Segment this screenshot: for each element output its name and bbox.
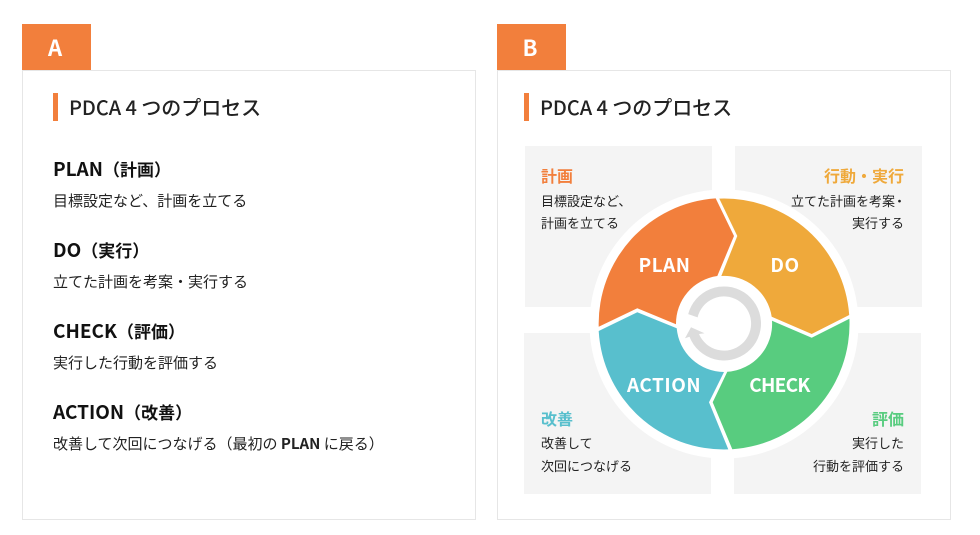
tab B: B	[522, 31, 537, 63]
segment: CHECK	[713, 319, 850, 449]
segment: PLAN	[599, 198, 734, 327]
panel A heading: PDCA 4 つのプロセス	[69, 92, 261, 121]
action description	[541, 433, 632, 475]
box: plan background	[525, 146, 712, 307]
DO heading: DO（実行）	[53, 236, 149, 263]
do description: 実行する	[852, 213, 904, 232]
plan description	[541, 191, 631, 232]
panel A frame	[22, 70, 476, 520]
ACTION heading: ACTION（改善）	[53, 398, 192, 425]
CHECK text: 実行した行動を評価する	[53, 352, 218, 373]
action description: 改善して	[541, 433, 593, 452]
box: do background	[735, 146, 922, 307]
tab A: A	[48, 31, 62, 63]
panel A heading accent	[53, 93, 58, 121]
action label: 改善	[541, 406, 573, 430]
DO text: 立てた計画を考案・実行する	[53, 271, 248, 292]
segment: DO: DO	[770, 251, 800, 278]
check label: 評価	[872, 406, 904, 430]
CHECK heading: CHECK（評価）	[53, 317, 185, 344]
tab B	[497, 24, 566, 70]
check description: 実行した	[852, 433, 904, 452]
box: action background	[524, 333, 711, 494]
icon: circular arrow	[685, 286, 761, 360]
segment: CHECK: CHECK	[749, 371, 811, 398]
white ring behind cycle	[590, 190, 858, 458]
check description: 行動を評価する	[813, 456, 904, 475]
do description: 立てた計画を考案・	[791, 191, 906, 210]
ACTION text: 改善して次回につなげる（最初の PLAN に戻る）	[53, 433, 384, 454]
panel B heading accent	[524, 93, 529, 121]
segment: DO	[719, 199, 849, 334]
action description: 次回につなげる	[541, 456, 632, 475]
panel B heading: PDCA 4 つのプロセス	[540, 92, 732, 121]
segment: ACTION	[599, 312, 728, 449]
plan label: 計画	[541, 163, 573, 187]
do label: 行動・実行	[824, 163, 904, 187]
check description	[813, 433, 904, 475]
plan description: 計画を立てる	[541, 213, 619, 232]
tab A	[22, 24, 91, 70]
panel B frame	[497, 70, 951, 520]
segment: PLAN: PLAN	[639, 251, 690, 278]
PLAN text: 目標設定など、計画を立てる	[53, 190, 247, 211]
segment: ACTION: ACTION	[626, 371, 701, 398]
PLAN heading: PLAN（計画）	[53, 155, 171, 182]
box: check background	[734, 333, 921, 494]
plan description: 目標設定など、	[541, 191, 631, 210]
do description	[791, 191, 906, 232]
